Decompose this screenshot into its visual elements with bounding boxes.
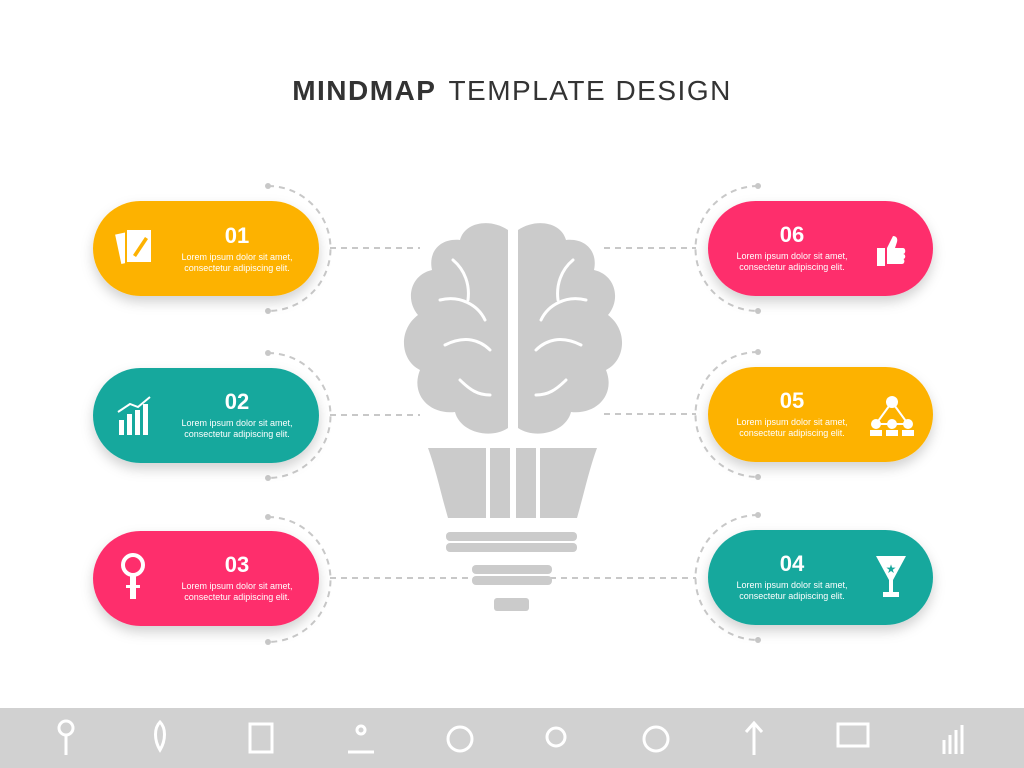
pill 05 <box>708 367 933 462</box>
pill 04 <box>708 530 933 625</box>
pill texts: 04 <box>780 551 805 576</box>
pill texts: consectetur adipiscing elit. <box>184 263 290 273</box>
pill texts: 03 <box>225 552 249 577</box>
pill texts: Lorem ipsum dolor sit amet, <box>736 417 848 427</box>
pill texts: consectetur adipiscing elit. <box>739 262 845 272</box>
pill texts: consectetur adipiscing elit. <box>184 429 290 439</box>
pill texts: Lorem ipsum dolor sit amet, <box>736 580 848 590</box>
pill texts: 05 <box>780 388 804 413</box>
title: MINDMAP TEMPLATE DESIGN <box>292 75 732 106</box>
pill texts: 06 <box>780 222 804 247</box>
footer band <box>0 708 1024 768</box>
icon: brain bulb <box>404 223 622 611</box>
pill 03 <box>93 531 319 626</box>
pill 02 <box>93 368 319 463</box>
pill 06 <box>708 201 933 296</box>
pill texts: consectetur adipiscing elit. <box>739 428 845 438</box>
pill texts: Lorem ipsum dolor sit amet, <box>736 251 848 261</box>
pill texts: 01 <box>225 223 249 248</box>
pill texts: consectetur adipiscing elit. <box>739 591 845 601</box>
pill icons: ★ <box>886 562 896 576</box>
pill texts <box>181 222 848 602</box>
pill texts: 02 <box>225 389 249 414</box>
pill icons <box>115 229 914 599</box>
connectors <box>268 186 758 642</box>
pill texts: Lorem ipsum dolor sit amet, <box>181 418 293 428</box>
pill 01 <box>93 201 319 296</box>
pill texts: Lorem ipsum dolor sit amet, <box>181 581 293 591</box>
pill texts: Lorem ipsum dolor sit amet, <box>181 252 293 262</box>
pill texts: consectetur adipiscing elit. <box>184 592 290 602</box>
